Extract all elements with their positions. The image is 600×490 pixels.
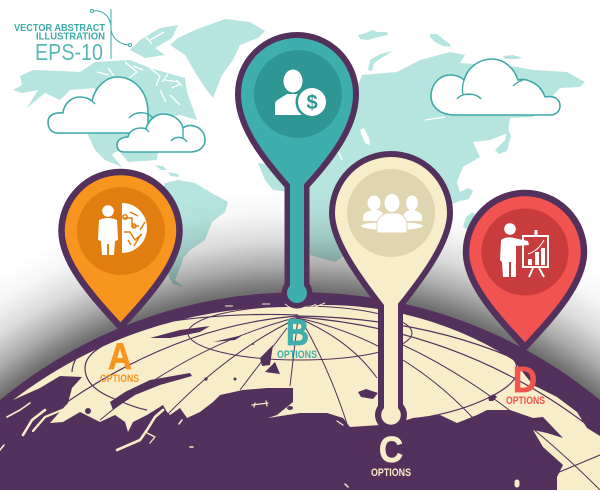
pin A [62, 172, 180, 327]
cloud 3 arcs [457, 80, 523, 99]
letter C: C [379, 429, 403, 470]
label A [100, 336, 139, 385]
coast slivers [0, 401, 517, 487]
icon: businessman with dollar coin: $ [306, 92, 318, 114]
letter A: A [108, 336, 132, 377]
pin C inner disc [347, 169, 435, 257]
pin C bulb [375, 399, 407, 431]
pin D shape [466, 193, 584, 347]
options B: OPTIONS [277, 349, 317, 361]
pin B inner disc [254, 50, 342, 138]
shadow behind globe [0, 160, 600, 420]
options C: OPTIONS [371, 467, 411, 479]
pole flecks [225, 303, 325, 314]
globe rim and land mass [0, 292, 600, 490]
options A: OPTIONS [100, 373, 139, 385]
cloud 2 arcs [146, 128, 187, 142]
label C [371, 429, 411, 479]
label B [277, 312, 317, 361]
decorative connector [90, 9, 132, 59]
globe [0, 292, 600, 490]
heading line 3: EPS-10 [35, 39, 103, 65]
pin C [332, 154, 450, 431]
icon: businessman with dollar coin [275, 70, 328, 118]
pin B bulb [282, 278, 312, 308]
pin B [238, 35, 356, 308]
label D [506, 359, 545, 407]
cloud 2 [117, 114, 205, 152]
icon: person and globe [98, 203, 147, 255]
cloud 1 arc [92, 101, 153, 118]
meridian and latitude lines [67, 306, 600, 490]
world map [13, 19, 585, 287]
letter D: D [513, 359, 537, 400]
letter B: B [286, 312, 309, 353]
heading line 1: VECTOR ABSTRACT [14, 23, 105, 34]
pin D inner disc [482, 208, 568, 296]
pin A shape [62, 172, 180, 327]
pin C shape [332, 154, 450, 408]
pin B shape [238, 35, 356, 285]
cream ocean [13, 305, 600, 490]
cloud 1 [48, 77, 148, 133]
cloud 3 [431, 59, 560, 115]
eps label [14, 23, 105, 65]
icon: presenter with chart [500, 223, 548, 277]
icon: team at table [361, 194, 423, 233]
heading line 2: ILLUSTRATION [36, 32, 105, 42]
lakes and islands [85, 326, 497, 414]
options D: OPTIONS [506, 395, 545, 407]
pin A inner disc [77, 187, 165, 275]
pin D [466, 193, 584, 347]
map details [97, 30, 515, 180]
